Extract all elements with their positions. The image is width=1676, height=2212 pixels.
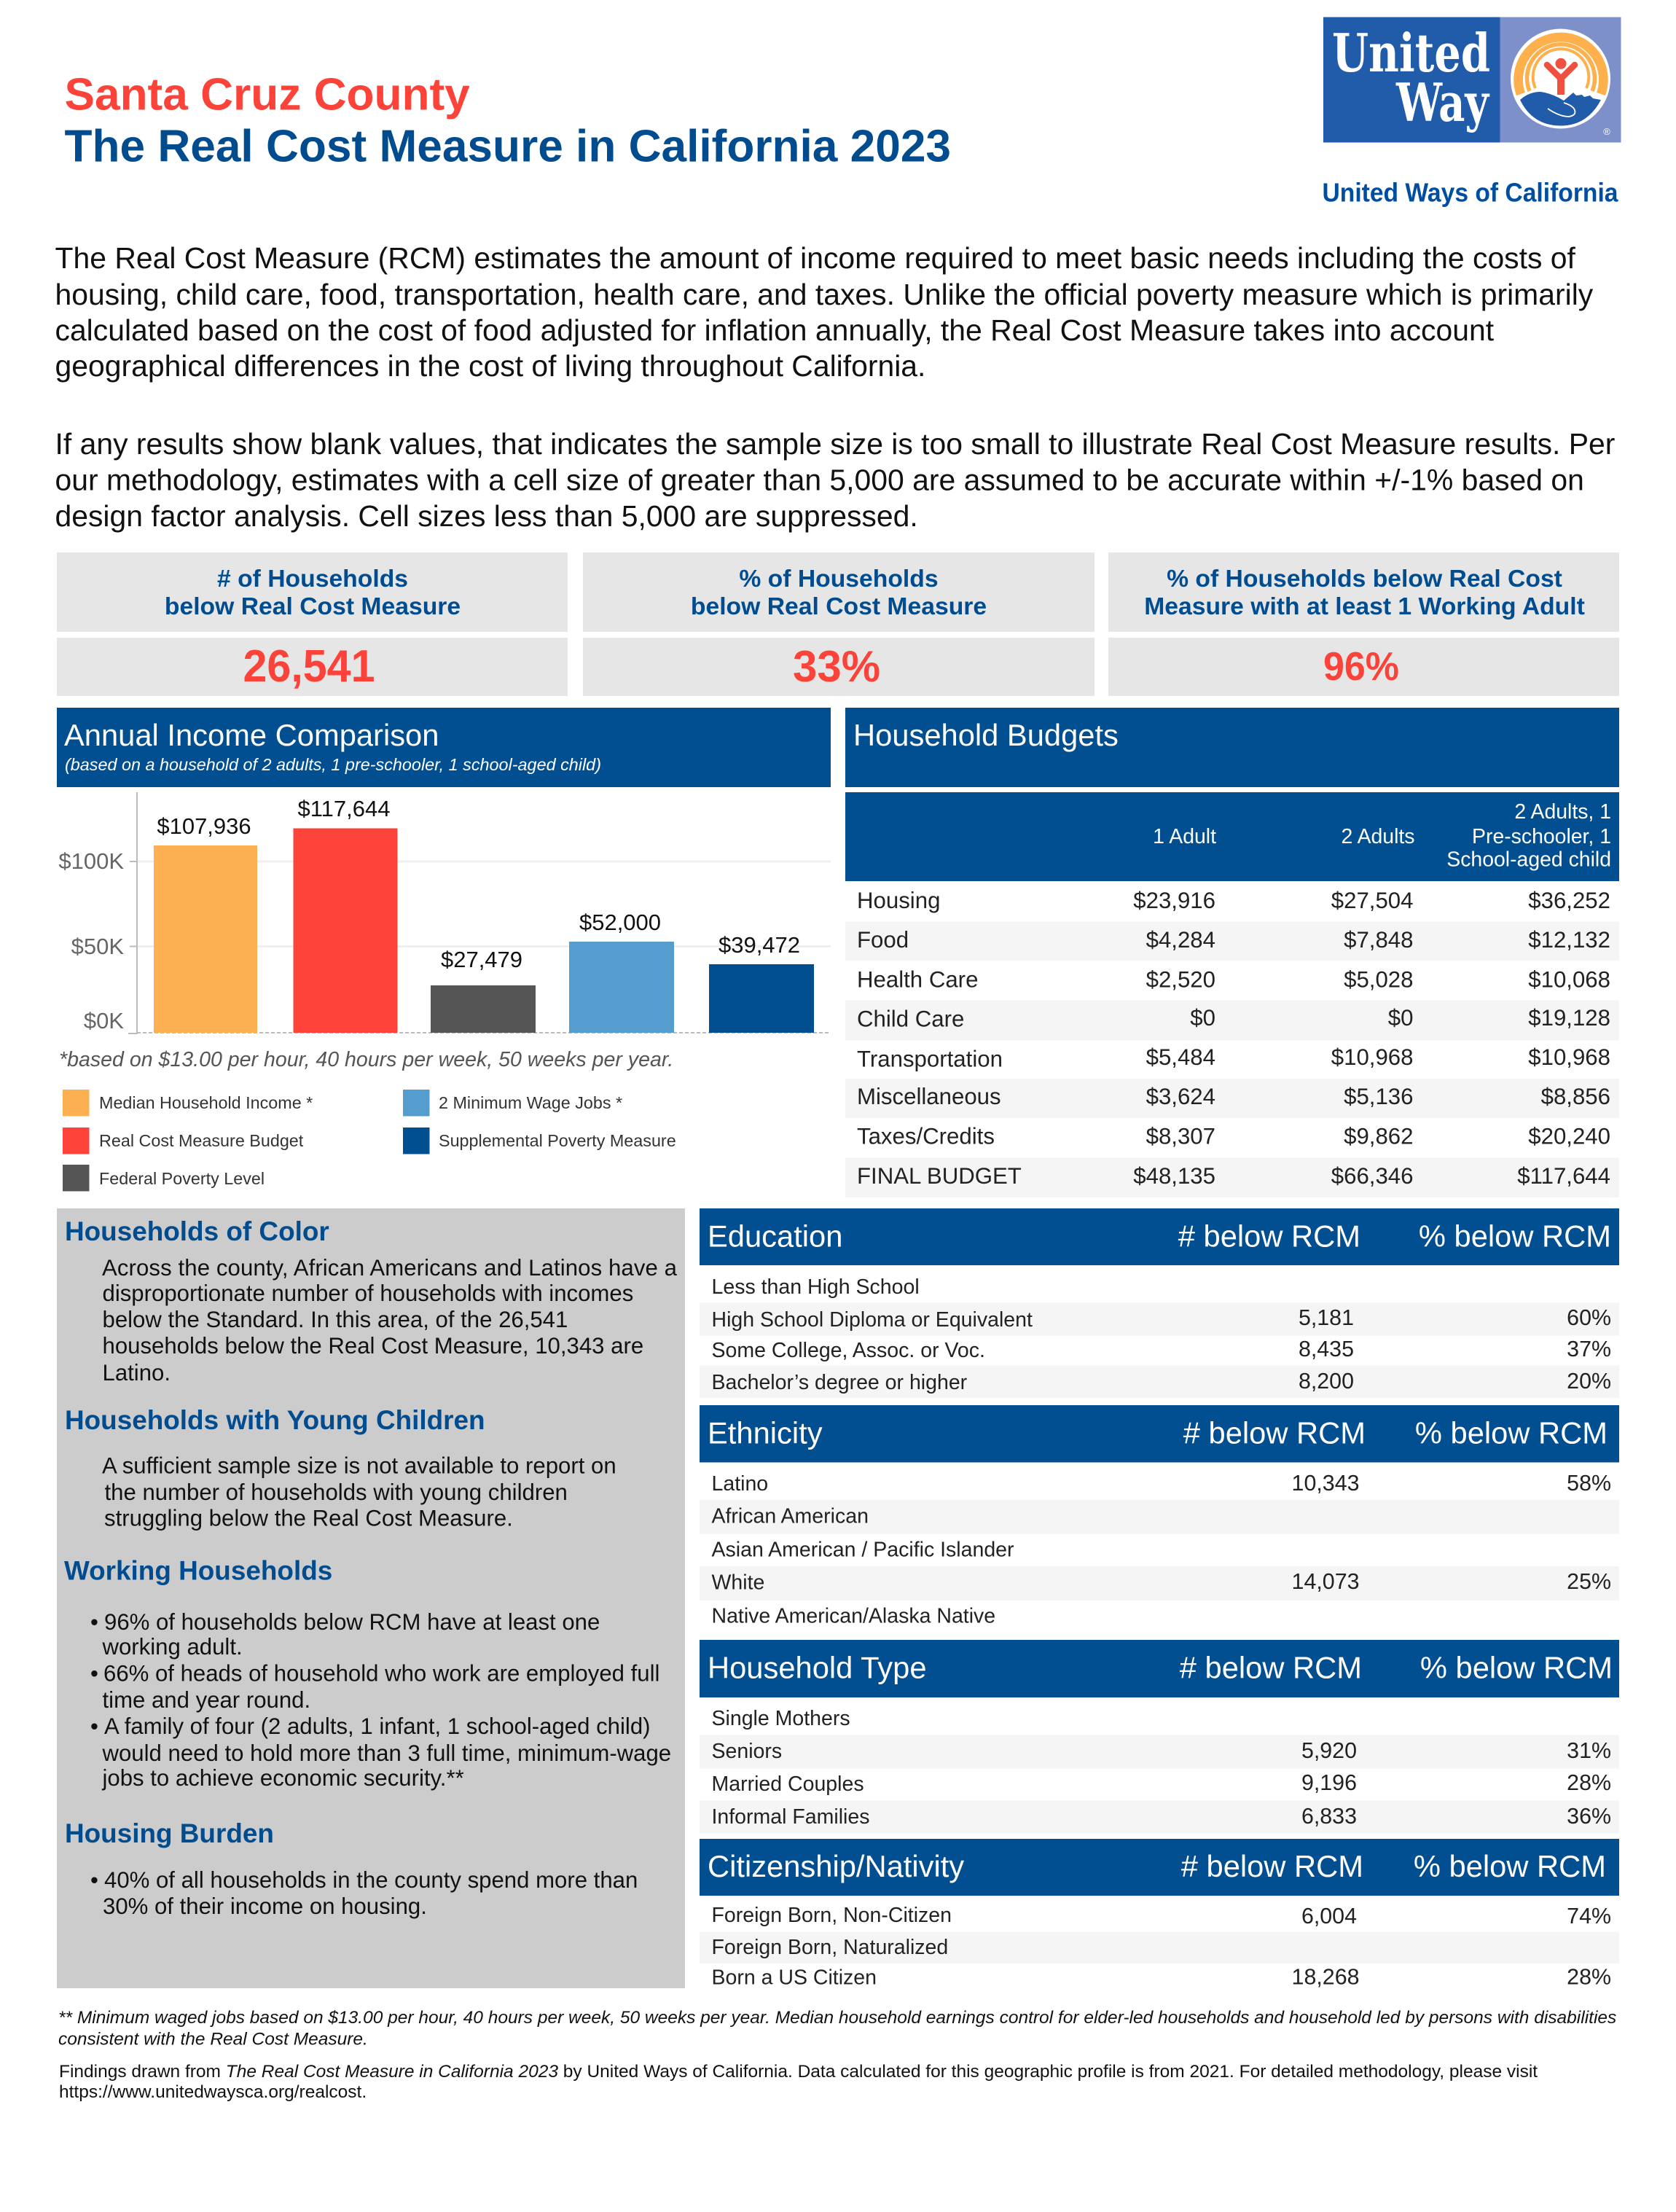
table: household budgets: $8,307 bbox=[1146, 1124, 1215, 1149]
intro paragraph: geographical differences in the cost of living throughout California. bbox=[55, 349, 925, 383]
table: education: Education bbox=[708, 1219, 842, 1254]
stat: working adult: % of Households below Real Cost bbox=[1167, 565, 1562, 593]
table: household type: Seniors bbox=[711, 1740, 782, 1763]
text: working households: working adult. bbox=[102, 1634, 243, 1660]
text: working households: 96% of households below RCM have at least one bbox=[104, 1609, 600, 1635]
text: working households: jobs to achieve economic security.** bbox=[102, 1765, 464, 1791]
table: ethnicity: # below RCM bbox=[1183, 1415, 1366, 1450]
table: household budgets: $3,624 bbox=[1146, 1084, 1215, 1109]
bar chart: $100K bbox=[58, 848, 124, 874]
table: education: 37% bbox=[1567, 1337, 1611, 1361]
footnote: sources: Findings drawn from The Real Cost Measure in California 2023 by United Ways of California. Data calculated for this geographic profile is from 2021. For detailed methodology, please visit bbox=[59, 2062, 1538, 2082]
methodology paragraph: our methodology, estimates with a cell size of greater than 5,000 are assumed to be accurate within +/-1% based on bbox=[55, 464, 1584, 497]
text: working households bbox=[90, 1609, 671, 1791]
table: household type: # below RCM bbox=[1180, 1650, 1362, 1685]
logo: United Way: United bbox=[1332, 22, 1490, 84]
text: households of color: below the Standard. In this area, of the 26,541 bbox=[102, 1307, 568, 1332]
table: citizenship/nativity: 18,268 bbox=[1292, 1965, 1360, 1990]
text: housing burden: • bbox=[90, 1867, 98, 1893]
text: housing burden: 30% of their income on housing. bbox=[103, 1894, 427, 1919]
text: households of color bbox=[102, 1255, 678, 1386]
table: household budgets: $66,346 bbox=[1331, 1163, 1414, 1189]
table: household budgets: $10,068 bbox=[1528, 966, 1610, 993]
text: working households: • bbox=[90, 1660, 98, 1687]
table: education bbox=[700, 1208, 1619, 1398]
intro paragraph: calculated based on the cost of food adjusted for inflation annually, the Real Cost Measure takes into account bbox=[55, 313, 1495, 347]
table: household budgets: $5,028 bbox=[1344, 966, 1414, 993]
stat: working adult bbox=[1108, 552, 1619, 696]
table: household type: Informal Families bbox=[711, 1805, 869, 1829]
table: household budgets: $0 bbox=[1190, 1005, 1215, 1031]
stat: percent of households: 33% bbox=[793, 642, 880, 691]
stat: number of households: 26,541 bbox=[243, 641, 375, 692]
table: citizenship/nativity: 74% bbox=[1567, 1904, 1611, 1928]
footnote: sources: https://www.unitedwaysca.org/realcost. bbox=[59, 2082, 367, 2102]
text: housing burden bbox=[90, 1867, 638, 1919]
table: education: 60% bbox=[1567, 1305, 1611, 1330]
table: household budgets: Transportation bbox=[857, 1047, 1003, 1071]
bar chart bbox=[58, 792, 831, 1034]
panel: household narratives bbox=[57, 1208, 685, 1988]
table: household type: 6,833 bbox=[1301, 1804, 1357, 1829]
intro paragraph: The Real Cost Measure (RCM) estimates the amount of income required to meet basic needs including the costs of bbox=[55, 241, 1576, 275]
table: household budgets: $10,968 bbox=[1331, 1044, 1414, 1070]
table: education: 20% bbox=[1567, 1369, 1611, 1394]
chart footnote: *based on $13.00 per hour, 40 hours per week, 50 weeks per year. bbox=[59, 1048, 673, 1071]
table: ethnicity: White bbox=[711, 1571, 764, 1595]
table: education: % below RCM bbox=[1419, 1219, 1611, 1254]
table: ethnicity: % below RCM bbox=[1415, 1415, 1608, 1450]
table: citizenship/nativity: % below RCM bbox=[1414, 1849, 1606, 1883]
text: working households: would need to hold more than 3 full time, minimum-wage bbox=[102, 1740, 671, 1766]
table: household budgets: $8,856 bbox=[1541, 1084, 1610, 1109]
text: households with young children: the number of households with young children bbox=[105, 1480, 568, 1505]
footnote: minimum wage: ** Minimum waged jobs based on $13.00 per hour, 40 hours per week, 50 weeks per year. Median household earnings control for elder-led households and household led by persons with disabilities bbox=[58, 2008, 1616, 2028]
text: housing burden: 40% of all households in the county spend more than bbox=[104, 1867, 638, 1893]
panel: annual income comparison header: (based on a household of 2 adults, 1 pre-schooler, 1 school-aged child) bbox=[65, 755, 601, 774]
stat: number of households: # of Households bbox=[217, 565, 408, 593]
table: household budgets bbox=[845, 792, 1619, 1197]
table: household budgets: $9,862 bbox=[1344, 1124, 1414, 1149]
table: household budgets: $20,240 bbox=[1528, 1124, 1610, 1149]
footnote: sources bbox=[59, 2062, 1538, 2102]
panel: household budgets header bbox=[845, 708, 1619, 787]
table: household budgets: $7,848 bbox=[1344, 927, 1414, 953]
bar chart: $107,936 bbox=[157, 813, 251, 839]
table: education: Some College, Assoc. or Voc. bbox=[711, 1339, 985, 1362]
logo: United Way bbox=[1323, 17, 1621, 143]
table: education: 8,200 bbox=[1299, 1369, 1354, 1394]
table: education: 5,181 bbox=[1299, 1305, 1354, 1330]
table: citizenship/nativity: Born a US Citizen bbox=[711, 1966, 877, 1990]
footnote: minimum wage: consistent with the Real Cost Measure. bbox=[58, 2029, 368, 2049]
bar chart: $52,000 bbox=[579, 910, 661, 935]
table: household budgets: Miscellaneous bbox=[857, 1084, 1001, 1109]
table: household budgets: $48,135 bbox=[1133, 1163, 1215, 1189]
text: households of color: disproportionate number of households with incomes bbox=[102, 1281, 633, 1306]
table: citizenship/nativity: Citizenship/Nativity bbox=[708, 1849, 964, 1883]
table: citizenship/nativity: Foreign Born, Non-Citizen bbox=[711, 1904, 952, 1927]
table: household budgets: $19,128 bbox=[1528, 1005, 1610, 1031]
text: households with young children bbox=[102, 1453, 616, 1531]
text: working households: • bbox=[90, 1713, 98, 1739]
text: households of color: households below the Real Cost Measure, 10,343 are bbox=[102, 1333, 643, 1359]
stat: working adult: 96% bbox=[1323, 644, 1399, 689]
table: household budgets: Taxes/Credits bbox=[857, 1124, 995, 1149]
table: ethnicity: 10,343 bbox=[1292, 1471, 1360, 1496]
text: working households: time and year round. bbox=[102, 1687, 310, 1713]
table: household budgets: Housing bbox=[857, 888, 940, 913]
table: household budgets: $5,136 bbox=[1344, 1084, 1414, 1109]
table: household budgets: $10,968 bbox=[1528, 1044, 1610, 1070]
legend: 2 Minimum Wage Jobs * bbox=[439, 1093, 622, 1112]
methodology paragraph bbox=[55, 427, 1615, 533]
text: households with young children: A sufficient sample size is not available to report on bbox=[102, 1453, 616, 1478]
table: household type: 31% bbox=[1567, 1738, 1611, 1763]
table: household type: Single Mothers bbox=[711, 1707, 850, 1730]
table: household budgets: $0 bbox=[1388, 1005, 1414, 1031]
intro paragraph bbox=[55, 241, 1594, 383]
title: The Real Cost Measure in California 2023 bbox=[64, 121, 951, 172]
table: citizenship/nativity bbox=[700, 1839, 1619, 1990]
logo: United Way: ® bbox=[1603, 126, 1610, 137]
table: household type: % below RCM bbox=[1420, 1650, 1613, 1685]
bar chart: $0K bbox=[84, 1008, 124, 1033]
table: household budgets: $2,520 bbox=[1146, 966, 1215, 993]
table: household budgets: Child Care bbox=[857, 1006, 964, 1032]
bar chart: $39,472 bbox=[718, 932, 800, 958]
table: ethnicity: Latino bbox=[711, 1472, 768, 1496]
table: household type: 9,196 bbox=[1301, 1770, 1357, 1795]
table: ethnicity: Ethnicity bbox=[708, 1415, 823, 1450]
table: citizenship/nativity: # below RCM bbox=[1181, 1849, 1363, 1883]
table: household budgets: $4,284 bbox=[1146, 927, 1215, 953]
logo caption: United Ways of California bbox=[1322, 178, 1618, 207]
panel: annual income comparison header: Annual Income Comparison bbox=[64, 718, 439, 752]
stat: working adult: Measure with at least 1 Working Adult bbox=[1144, 593, 1585, 620]
table: household budgets: Pre-schooler, 1 bbox=[1472, 825, 1611, 848]
table: household type: 36% bbox=[1567, 1804, 1611, 1829]
methodology paragraph: If any results show blank values, that indicates the sample size is too small to illustrate Real Cost Measure results. Per bbox=[55, 427, 1615, 461]
stat: number of households bbox=[57, 552, 568, 696]
table: household budgets: $23,916 bbox=[1133, 888, 1215, 913]
table: household type: Married Couples bbox=[711, 1773, 864, 1796]
table: household type: 5,920 bbox=[1301, 1738, 1357, 1763]
text: working households: A family of four (2 adults, 1 infant, 1 school-aged child) bbox=[104, 1713, 651, 1739]
text: working households: • bbox=[90, 1609, 98, 1635]
heading: households of color: Households of Color bbox=[65, 1216, 329, 1246]
table: household budgets: $36,252 bbox=[1528, 888, 1610, 913]
table: citizenship/nativity: 28% bbox=[1567, 1965, 1611, 1990]
table: household budgets: FINAL BUDGET bbox=[857, 1163, 1022, 1189]
heading: housing burden: Housing Burden bbox=[65, 1818, 274, 1848]
table: household type: 28% bbox=[1567, 1770, 1611, 1795]
intro paragraph: housing, child care, food, transportation, health care, and taxes. Unlike the official poverty measure which is primarily bbox=[55, 278, 1594, 311]
footnote: minimum wage bbox=[58, 2008, 1616, 2049]
title: Santa Cruz County bbox=[64, 70, 470, 120]
table: education: Less than High School bbox=[711, 1275, 920, 1299]
text: households with young children: struggling below the Real Cost Measure. bbox=[104, 1506, 513, 1531]
table: ethnicity: African American bbox=[711, 1504, 869, 1528]
logo: United Way: Way bbox=[1395, 71, 1490, 133]
table: household budgets: Health Care bbox=[857, 966, 978, 993]
text: working households: 66% of heads of household who work are employed full bbox=[103, 1660, 659, 1687]
stat: percent of households: % of Households bbox=[739, 565, 939, 593]
table: education: High School Diploma or Equivalent bbox=[711, 1308, 1033, 1332]
table: household budgets: $27,504 bbox=[1331, 888, 1414, 913]
table: ethnicity: Asian American / Pacific Islander bbox=[711, 1538, 1014, 1561]
table: ethnicity: Native American/Alaska Native bbox=[711, 1605, 995, 1628]
table: ethnicity: 25% bbox=[1567, 1569, 1611, 1594]
title bbox=[64, 70, 951, 172]
methodology paragraph: design factor analysis. Cell sizes less than 5,000 are suppressed. bbox=[55, 499, 918, 533]
table: ethnicity: 58% bbox=[1567, 1471, 1611, 1496]
legend: Supplemental Poverty Measure bbox=[439, 1131, 676, 1150]
table: household budgets: 1 Adult bbox=[1153, 825, 1216, 848]
bar chart: $50K bbox=[71, 934, 124, 959]
table: household budgets: $117,644 bbox=[1517, 1163, 1610, 1189]
table: education: Bachelor’s degree or higher bbox=[711, 1371, 968, 1394]
table: education: # below RCM bbox=[1178, 1219, 1360, 1254]
table: household budgets: Food bbox=[857, 927, 909, 953]
legend bbox=[63, 1090, 676, 1191]
heading: working households: Working Households bbox=[64, 1555, 332, 1586]
heading: households with young children: Households with Young Children bbox=[65, 1405, 485, 1435]
table: household budgets: 2 Adults, 1 bbox=[1514, 800, 1611, 824]
table: ethnicity bbox=[700, 1405, 1619, 1628]
stat: percent of households bbox=[583, 552, 1095, 696]
table: household budgets: $5,484 bbox=[1146, 1044, 1215, 1070]
legend: Real Cost Measure Budget bbox=[99, 1131, 304, 1150]
table: citizenship/nativity: Foreign Born, Naturalized bbox=[711, 1936, 948, 1959]
legend: Median Household Income * bbox=[99, 1093, 313, 1112]
table: ethnicity: 14,073 bbox=[1292, 1569, 1360, 1594]
panel: annual income comparison header bbox=[57, 708, 831, 787]
panel: household budgets header: Household Budgets bbox=[853, 718, 1119, 752]
text: households of color: Latino. bbox=[102, 1360, 171, 1386]
table: citizenship/nativity: 6,004 bbox=[1301, 1904, 1357, 1928]
table: household budgets: 2 Adults bbox=[1341, 825, 1415, 848]
table: household type: Household Type bbox=[708, 1650, 927, 1685]
bar chart: $117,644 bbox=[297, 796, 391, 821]
table: household budgets: School-aged child bbox=[1446, 848, 1611, 872]
stat: number of households: below Real Cost Measure bbox=[165, 593, 461, 620]
bar chart: $27,479 bbox=[441, 947, 522, 972]
table: household budgets: $12,132 bbox=[1528, 927, 1610, 953]
table: education: 8,435 bbox=[1299, 1337, 1354, 1361]
legend: Federal Poverty Level bbox=[99, 1169, 265, 1188]
stat: percent of households: below Real Cost Measure bbox=[691, 593, 987, 620]
text: households of color: Across the county, African Americans and Latinos have a bbox=[102, 1255, 678, 1281]
table: household type bbox=[700, 1640, 1619, 1834]
